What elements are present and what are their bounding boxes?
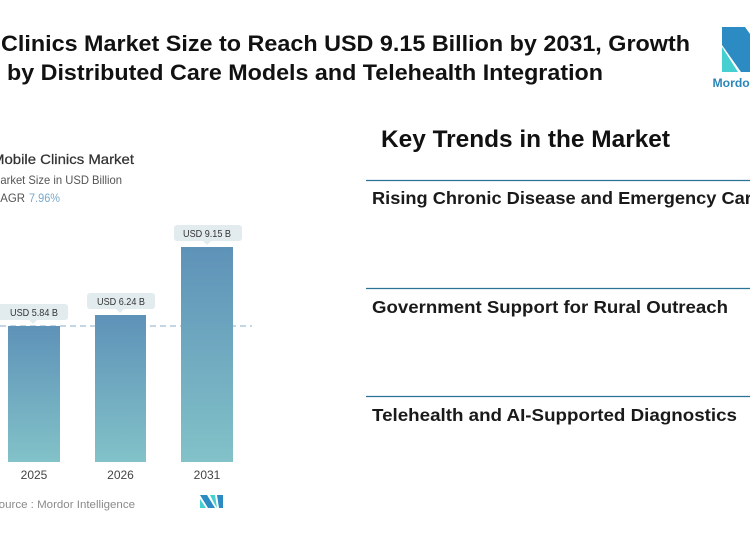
value label: 2025: USD 5.84 B bbox=[10, 307, 58, 319]
reference dashed line bbox=[0, 325, 252, 327]
trend: chronic disease: Rising Chronic Disease and Emergency Care bbox=[372, 188, 750, 208]
value label: 2031 bbox=[174, 225, 242, 245]
trend: government support: Government Support for Rural Outreach bbox=[372, 297, 728, 317]
title: by Distributed Care Models and Telehealth Integration bbox=[7, 60, 603, 85]
value label: 2026 bbox=[87, 293, 155, 313]
value label: 2031: USD 9.15 B bbox=[183, 228, 231, 240]
year labels: 2026 bbox=[107, 468, 134, 482]
bar: 2026 bbox=[95, 315, 146, 462]
panel: key trends bbox=[366, 126, 750, 425]
value label: 2026: USD 6.24 B bbox=[97, 296, 145, 308]
chart heading bbox=[0, 151, 134, 205]
value label: 2025 bbox=[0, 304, 68, 324]
chart heading: 7.96% bbox=[29, 191, 60, 205]
title: Clinics Market Size to Reach USD 9.15 Billion by 2031, Growth bbox=[1, 31, 690, 56]
bar chart bbox=[0, 225, 252, 482]
icon: Mordor logo bbox=[712, 27, 750, 90]
title bbox=[1, 31, 690, 85]
bar: 2031 bbox=[181, 247, 233, 462]
heading: key trends: Key Trends in the Market bbox=[381, 126, 670, 153]
year labels bbox=[21, 468, 221, 482]
trend: telehealth: Telehealth and AI-Supported Diagnostics bbox=[372, 405, 737, 425]
icon: small Mordor logo bbox=[200, 495, 223, 508]
year labels: 2031 bbox=[194, 468, 221, 482]
bar: 2025 bbox=[8, 326, 60, 462]
year labels: 2025 bbox=[21, 468, 48, 482]
